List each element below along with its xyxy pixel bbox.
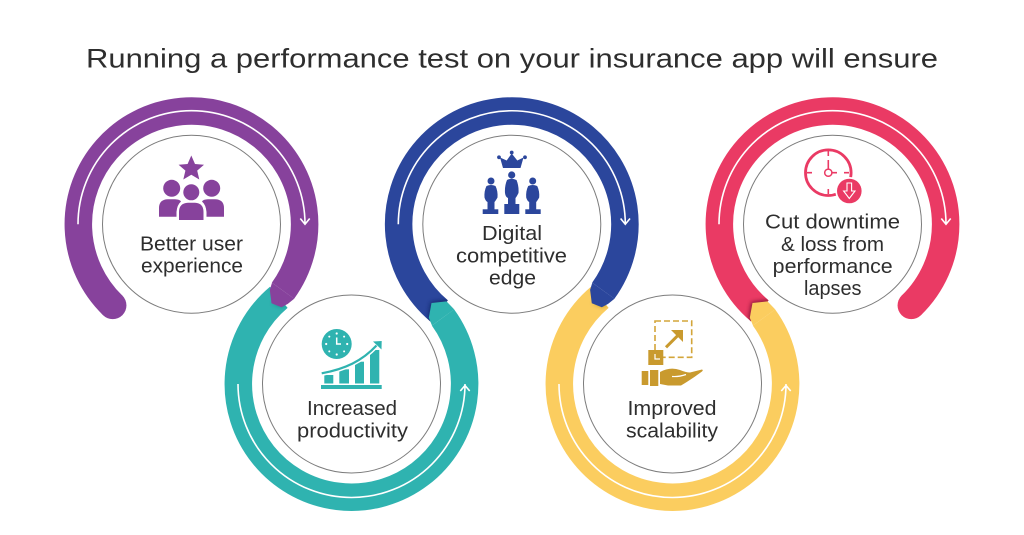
label: Increased (307, 398, 397, 420)
ring: red (719, 111, 946, 319)
label: Digital (482, 223, 542, 245)
label: performance (773, 256, 893, 278)
label (626, 398, 718, 442)
ring: teal (238, 297, 465, 497)
label: edge (489, 267, 536, 289)
arrow: yellow ring (559, 384, 791, 497)
label: productivity (297, 420, 408, 442)
arrow: red ring (719, 111, 951, 224)
label: competitive (456, 245, 567, 267)
label: Better user (140, 234, 243, 256)
label (765, 212, 900, 300)
ring: blue (399, 111, 625, 311)
icon: people with star (159, 156, 224, 220)
label: lapses (804, 278, 862, 300)
circle outline (744, 135, 922, 313)
icon: hand with scaling box (642, 321, 703, 386)
panel: cut downtime and loss (719, 111, 951, 313)
arrow: teal ring (238, 384, 470, 497)
circle outline (423, 135, 601, 313)
panel: better user experience (78, 111, 310, 313)
panel: improved scalability (559, 295, 791, 497)
ring: purple (78, 111, 305, 319)
icon: clock and growth chart (321, 329, 382, 389)
panel: digital competitive edge (398, 111, 630, 313)
label: experience (141, 256, 243, 278)
label: Improved (628, 398, 716, 420)
icon: podium with crown (483, 151, 541, 214)
label (456, 223, 567, 289)
title: Running a performance test on your insurance app will ensure (86, 44, 938, 74)
circle outline (262, 295, 440, 473)
circle outline (102, 135, 280, 313)
icon: clock with down arrow (806, 150, 863, 205)
ring: yellow (559, 297, 786, 497)
circle outline (584, 295, 762, 473)
panel: increased productivity (238, 295, 470, 497)
label (297, 398, 408, 442)
label: & loss from (781, 234, 884, 256)
label: Cut downtime (765, 212, 900, 234)
arrow: purple ring (78, 111, 310, 224)
label (140, 234, 243, 278)
arrow: blue ring (398, 111, 630, 224)
label: scalability (626, 420, 718, 442)
interlocking ring chain (78, 111, 946, 497)
